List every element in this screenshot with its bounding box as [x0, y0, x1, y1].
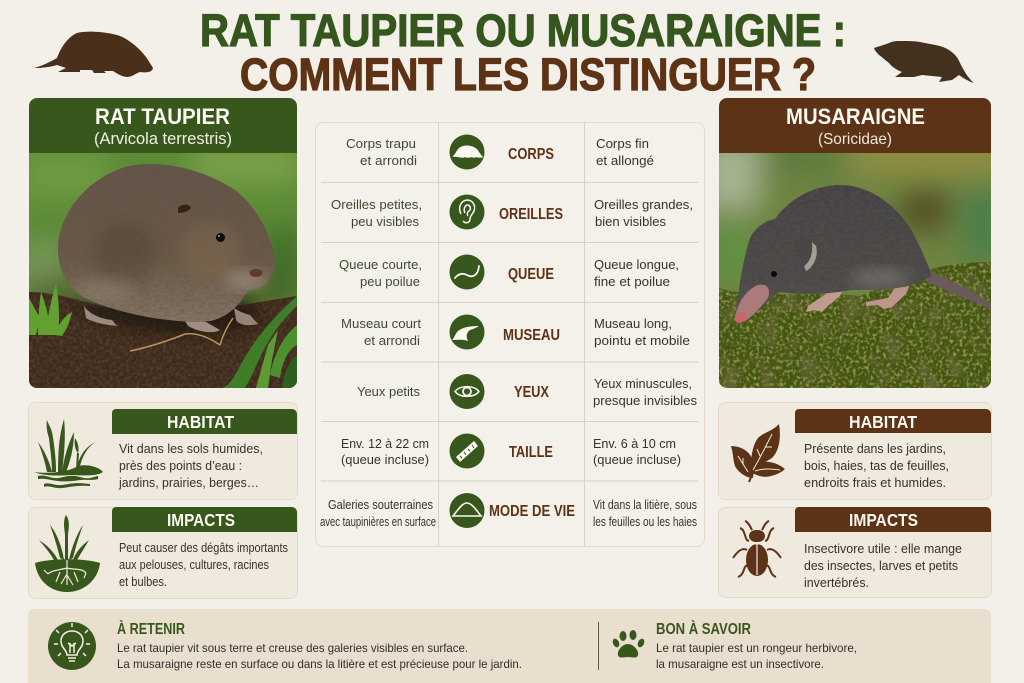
row: mode de vie: les feuilles ou les haies [593, 515, 697, 529]
row: queue: Queue courte, [339, 257, 422, 272]
row: museau: et arrondi [364, 333, 420, 348]
block: bon a savoir [611, 619, 857, 671]
panel: impacts rat taupier: aux pelouses, cultures, racines [119, 558, 269, 572]
panel: habitat rat taupier: jardins, prairies, berges… [118, 476, 259, 490]
row: taille: Env. 6 à 10 cm [593, 436, 676, 451]
panel: habitat rat taupier: HABITAT [167, 412, 234, 432]
panel: impacts rat taupier: et bulbes. [119, 575, 167, 589]
row: museau: Museau long, [594, 316, 672, 331]
row: museau: Museau court [341, 316, 421, 331]
panel: bottom summary [28, 609, 991, 683]
panel: habitat rat taupier: Vit dans les sols humides, [119, 442, 263, 456]
panel: impacts rat taupier: IMPACTS [167, 510, 235, 530]
row: corps: Corps fin [596, 136, 649, 151]
title [200, 5, 846, 100]
row: oreilles: Oreilles petites, [331, 197, 422, 212]
row: queue [339, 254, 679, 290]
row: corps: Corps trapu [346, 136, 416, 151]
row: taille: (queue incluse) [593, 452, 681, 467]
block: a retenir [48, 619, 522, 671]
panel: impacts rat taupier [28, 507, 298, 598]
row: queue: peu poilue [360, 274, 420, 289]
row: yeux: YEUX [514, 384, 549, 401]
heading: musaraigne: MUSARAIGNE [786, 104, 925, 129]
icon: plant with roots [35, 515, 100, 592]
icon: musaraigne silhouette [874, 41, 974, 83]
row: taille: (queue incluse) [341, 452, 429, 467]
block: a retenir: La musaraigne reste en surface ou dans la litière et est précieuse pour le jardin. [117, 657, 522, 671]
row: museau: MUSEAU [503, 327, 560, 344]
panel: impacts musaraigne: des insectes, larves et petits [804, 559, 958, 573]
row: taille: Env. 12 à 22 cm [341, 436, 429, 451]
photo: musaraigne [719, 153, 991, 388]
row: oreilles: bien visibles [595, 214, 666, 229]
icon: rat taupier silhouette [34, 32, 153, 77]
row: taille [341, 434, 681, 468]
row: mode de vie: Galeries souterraines [328, 498, 433, 512]
row: yeux: Yeux petits [357, 384, 420, 399]
panel: impacts musaraigne: Insectivore utile : elle mange [804, 542, 962, 556]
row: corps: CORPS [508, 146, 554, 163]
panel: habitat rat taupier: près des points d’eau : [119, 459, 242, 473]
row: oreilles: Oreilles grandes, [594, 197, 693, 212]
panel: habitat rat taupier [28, 402, 298, 500]
row: corps: et arrondi [360, 153, 417, 168]
panel: impacts musaraigne [718, 507, 992, 598]
icon: paw [611, 630, 646, 658]
panel: comparison table [316, 122, 704, 546]
icon: leaves [731, 424, 785, 482]
title: RAT TAUPIER OU MUSARAIGNE : [200, 5, 846, 56]
row: mode de vie: MODE DE VIE [489, 503, 575, 520]
row: mode de vie: Vit dans la litière, sous [593, 498, 697, 512]
icon: marsh plants [34, 419, 103, 488]
row: corps: et allongé [596, 153, 654, 168]
heading: musaraigne [719, 98, 991, 153]
panel: rat taupier [20, 98, 302, 388]
row: oreilles: OREILLES [499, 206, 563, 223]
row: mode de vie: avec taupinières en surface [320, 515, 436, 529]
row: queue: QUEUE [508, 266, 554, 283]
panel: impacts musaraigne: invertébrés. [804, 576, 869, 590]
photo: rat taupier [20, 145, 302, 388]
heading: rat taupier: (Arvicola terrestris) [94, 130, 232, 148]
panel: impacts musaraigne: IMPACTS [849, 510, 918, 530]
block: bon a savoir: Le rat taupier est un rongeur herbivore, [656, 641, 857, 655]
panel: habitat musaraigne: endroits frais et humides. [804, 476, 946, 490]
panel: impacts rat taupier: Peut causer des dégâts importants [119, 541, 288, 555]
row: yeux: Yeux minuscules, [594, 376, 692, 391]
row: queue: Queue longue, [594, 257, 679, 272]
title: COMMENT LES DISTINGUER ? [240, 49, 816, 100]
row: museau [341, 314, 690, 350]
panel: habitat musaraigne: HABITAT [849, 412, 917, 432]
panel: habitat musaraigne: Présente dans les jardins, [804, 442, 946, 456]
row: queue: fine et poilue [594, 274, 670, 289]
block: a retenir: À RETENIR [117, 619, 185, 638]
row: mode de vie [320, 493, 697, 529]
row: oreilles: peu visibles [351, 214, 419, 229]
row: museau: pointu et mobile [594, 333, 690, 348]
row: yeux: presque invisibles [593, 393, 697, 408]
heading: musaraigne: (Soricidae) [818, 131, 892, 148]
row: taille: TAILLE [509, 444, 553, 461]
row: oreilles [331, 194, 693, 230]
heading: rat taupier [29, 98, 297, 153]
block: a retenir: Le rat taupier vit sous terre et creuse des galeries visibles en surface. [117, 641, 468, 655]
block: bon a savoir: la musaraigne est un insectivore. [656, 657, 824, 671]
heading: rat taupier: RAT TAUPIER [95, 104, 230, 129]
row: corps [346, 134, 654, 170]
panel: habitat musaraigne [718, 402, 992, 500]
row: yeux [357, 374, 697, 409]
panel: habitat musaraigne: bois, haies, tas de feuilles, [804, 459, 949, 473]
block: bon a savoir: BON À SAVOIR [656, 619, 751, 638]
panel: musaraigne [719, 98, 991, 388]
icon: beetle [733, 521, 781, 577]
